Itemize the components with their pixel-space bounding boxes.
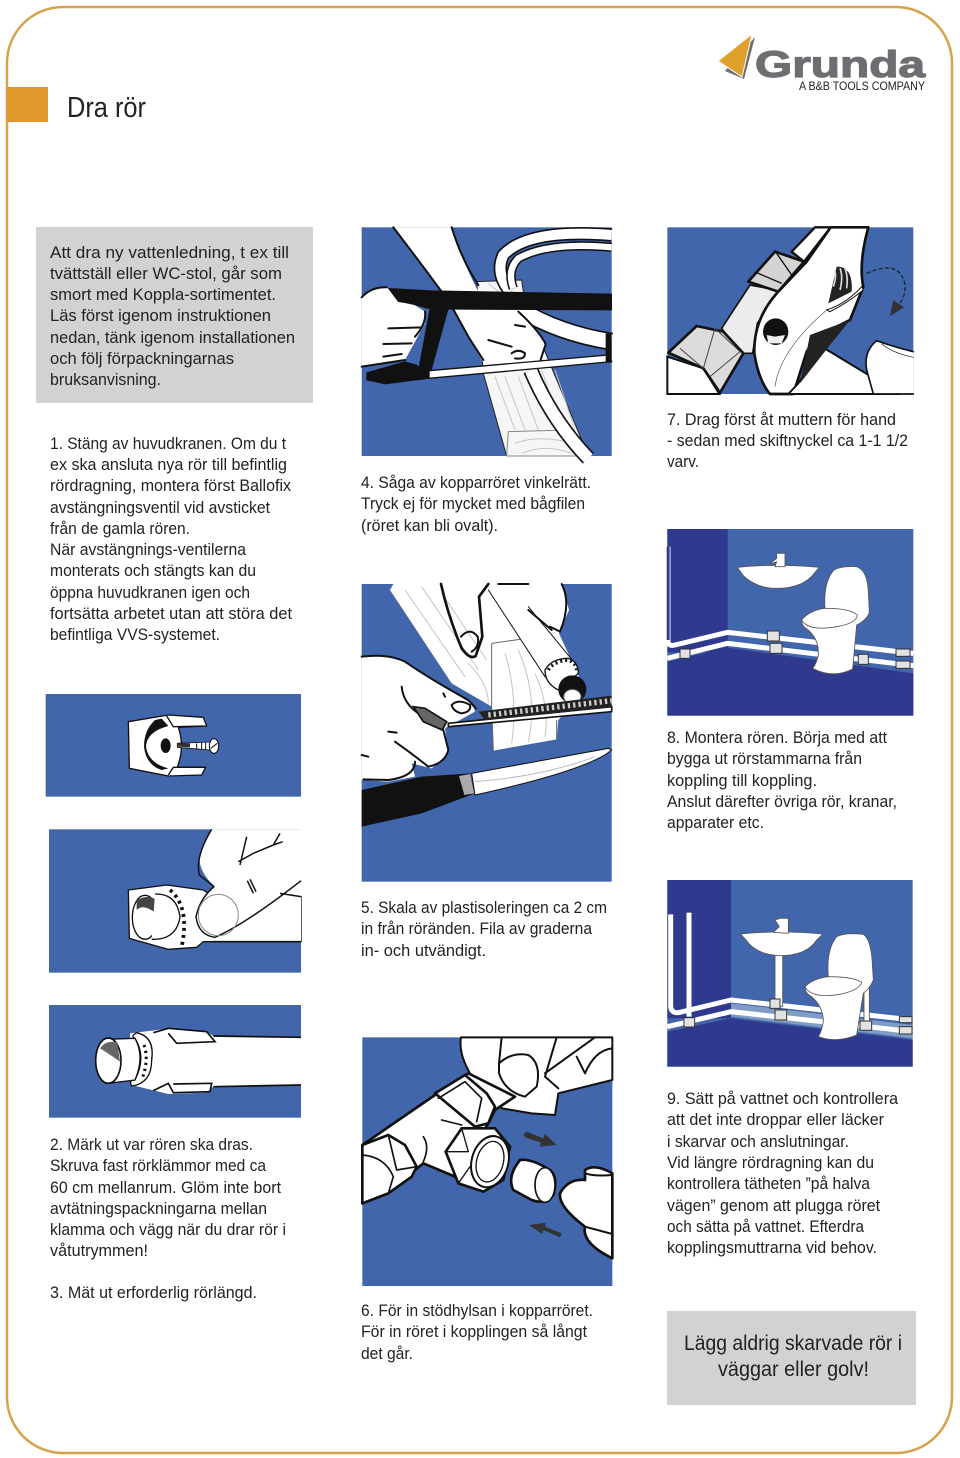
intro panel: Att dra ny vattenledning, t ex till: [50, 243, 289, 262]
step 4 text: 4. Såga av kopparröret vinkelrätt.: [361, 473, 591, 492]
step 2 and 3 text: våtutrymmen!: [50, 1241, 148, 1260]
step 8 text: [667, 728, 897, 832]
step 6 text: För in röret i kopplingen så långt: [361, 1322, 587, 1341]
step 4 text: (röret kan bli ovalt).: [361, 516, 498, 535]
step 8 text: apparater etc.: [667, 813, 764, 832]
step 1 text: rördragning, montera först Ballofix: [50, 476, 291, 495]
step 2 and 3 text: avtätningspackningarna mellan: [50, 1199, 267, 1218]
logo: Grunda: Grunda: [755, 44, 926, 85]
step 9 text: Vid längre rördragning kan du: [667, 1153, 874, 1172]
intro panel: bruksanvisning.: [50, 370, 161, 389]
step 8 text: 8. Montera rören. Börja med att: [667, 728, 887, 747]
step 7 text: 7. Drag först åt muttern för hand: [667, 410, 896, 429]
step 9 text: och sätta på vattnet. Efterdra: [667, 1217, 864, 1236]
step 5 text: in från röränden. Fila av graderna: [361, 919, 592, 938]
warning callout: Lägg aldrig skarvade rör i: [684, 1331, 902, 1355]
step 5 text: in- och utvändigt.: [361, 941, 486, 960]
warning callout: [667, 1311, 916, 1405]
intro panel: smort med Koppla-sortimentet.: [50, 285, 276, 304]
intro panel: och följ förpackningarnas: [50, 349, 234, 368]
step 9 text: vägen” genom att plugga röret: [667, 1196, 880, 1215]
intro panel: nedan, tänk igenom installationen: [50, 328, 295, 347]
warning callout: väggar eller golv!: [718, 1357, 869, 1381]
step 4 text: Tryck ej för mycket med bågfilen: [361, 494, 585, 513]
step 9 text: i skarvar och anslutningar.: [667, 1132, 849, 1151]
intro panel: tvättställ eller WC-stol, går som: [50, 264, 282, 283]
step 2 and 3 text: klamma och vägg när du drar rör i: [50, 1220, 286, 1239]
step 1 text: fortsätta arbetet utan att störa det: [50, 604, 292, 623]
step 9 text: [667, 1089, 899, 1257]
step 4 text: [361, 473, 591, 535]
step 5 text: [361, 898, 607, 960]
logo: Grunda: A B&B TOOLS COMPANY: [799, 79, 925, 93]
illustration: bathroom with risers connected: [667, 880, 913, 1067]
step 5 text: 5. Skala av plastisoleringen ca 2 cm: [361, 898, 607, 917]
step 2 and 3 text: 60 cm mellanrum. Glöm inte bort: [50, 1178, 281, 1197]
step 1 text: 1. Stäng av huvudkranen. Om du t: [50, 434, 286, 453]
step 8 text: koppling till koppling.: [667, 771, 817, 790]
step 2 and 3 text: 3. Mät ut erforderlig rörlängd.: [50, 1283, 257, 1302]
step 8 text: bygga ut rörstammarna från: [667, 749, 862, 768]
step 2 and 3 text: [50, 1135, 286, 1302]
step 1 text: [50, 434, 292, 644]
step 1 text: avstängningsventil vid avsticket: [50, 498, 270, 517]
step 7 text: varv.: [667, 452, 699, 471]
step 6 text: det går.: [361, 1344, 413, 1363]
step 9 text: 9. Sätt på vattnet och kontrollera: [667, 1089, 899, 1108]
step 9 text: att det inte droppar eller läcker: [667, 1110, 884, 1129]
logo: Grunda: [718, 34, 926, 93]
accent block: [7, 87, 48, 122]
illustration: fitting the support sleeve: [362, 1037, 612, 1286]
step 8 text: Anslut därefter övriga rör, kranar,: [667, 792, 897, 811]
step 1 text: ex ska ansluta nya rör till befintlig: [50, 455, 287, 474]
step 9 text: kontrollera tätheten ”på halva: [667, 1174, 870, 1193]
illustration: clip with screw: [46, 694, 301, 797]
step 1 text: När avstängnings-ventilerna: [50, 540, 247, 559]
step 7 text: - sedan med skiftnyckel ca 1-1 1/2: [667, 431, 908, 450]
step 7 text: [667, 410, 908, 471]
step 1 text: öppna huvudkranen igen och: [50, 583, 250, 602]
step 6 text: [361, 1301, 593, 1363]
step 6 text: 6. För in stödhylsan i kopparröret.: [361, 1301, 593, 1320]
intro panel: Läs först igenom instruktionen: [50, 306, 271, 325]
step 2 and 3 text: Skruva fast rörklämmor med ca: [50, 1156, 266, 1175]
step 1 text: monterats och stängts kan du: [50, 561, 256, 580]
illustration: filing the pipe: [362, 584, 612, 882]
intro panel: [36, 227, 313, 403]
step 9 text: kopplingsmuttrarna vid behov.: [667, 1238, 877, 1257]
step 1 text: befintliga VVS-systemet.: [50, 625, 220, 644]
illustration: pressing pipe into clip: [49, 829, 301, 973]
step 1 text: från de gamla rören.: [50, 519, 190, 538]
illustration: bathroom with pipes along wall: [667, 529, 913, 716]
illustration: pipe seated in clip: [49, 1005, 301, 1118]
illustration: sawing the pipe: [362, 227, 612, 458]
title: Dra rör: [67, 92, 146, 124]
illustration: tightening nut with wrench: [667, 227, 913, 394]
step 2 and 3 text: 2. Märk ut var rören ska dras.: [50, 1135, 253, 1154]
